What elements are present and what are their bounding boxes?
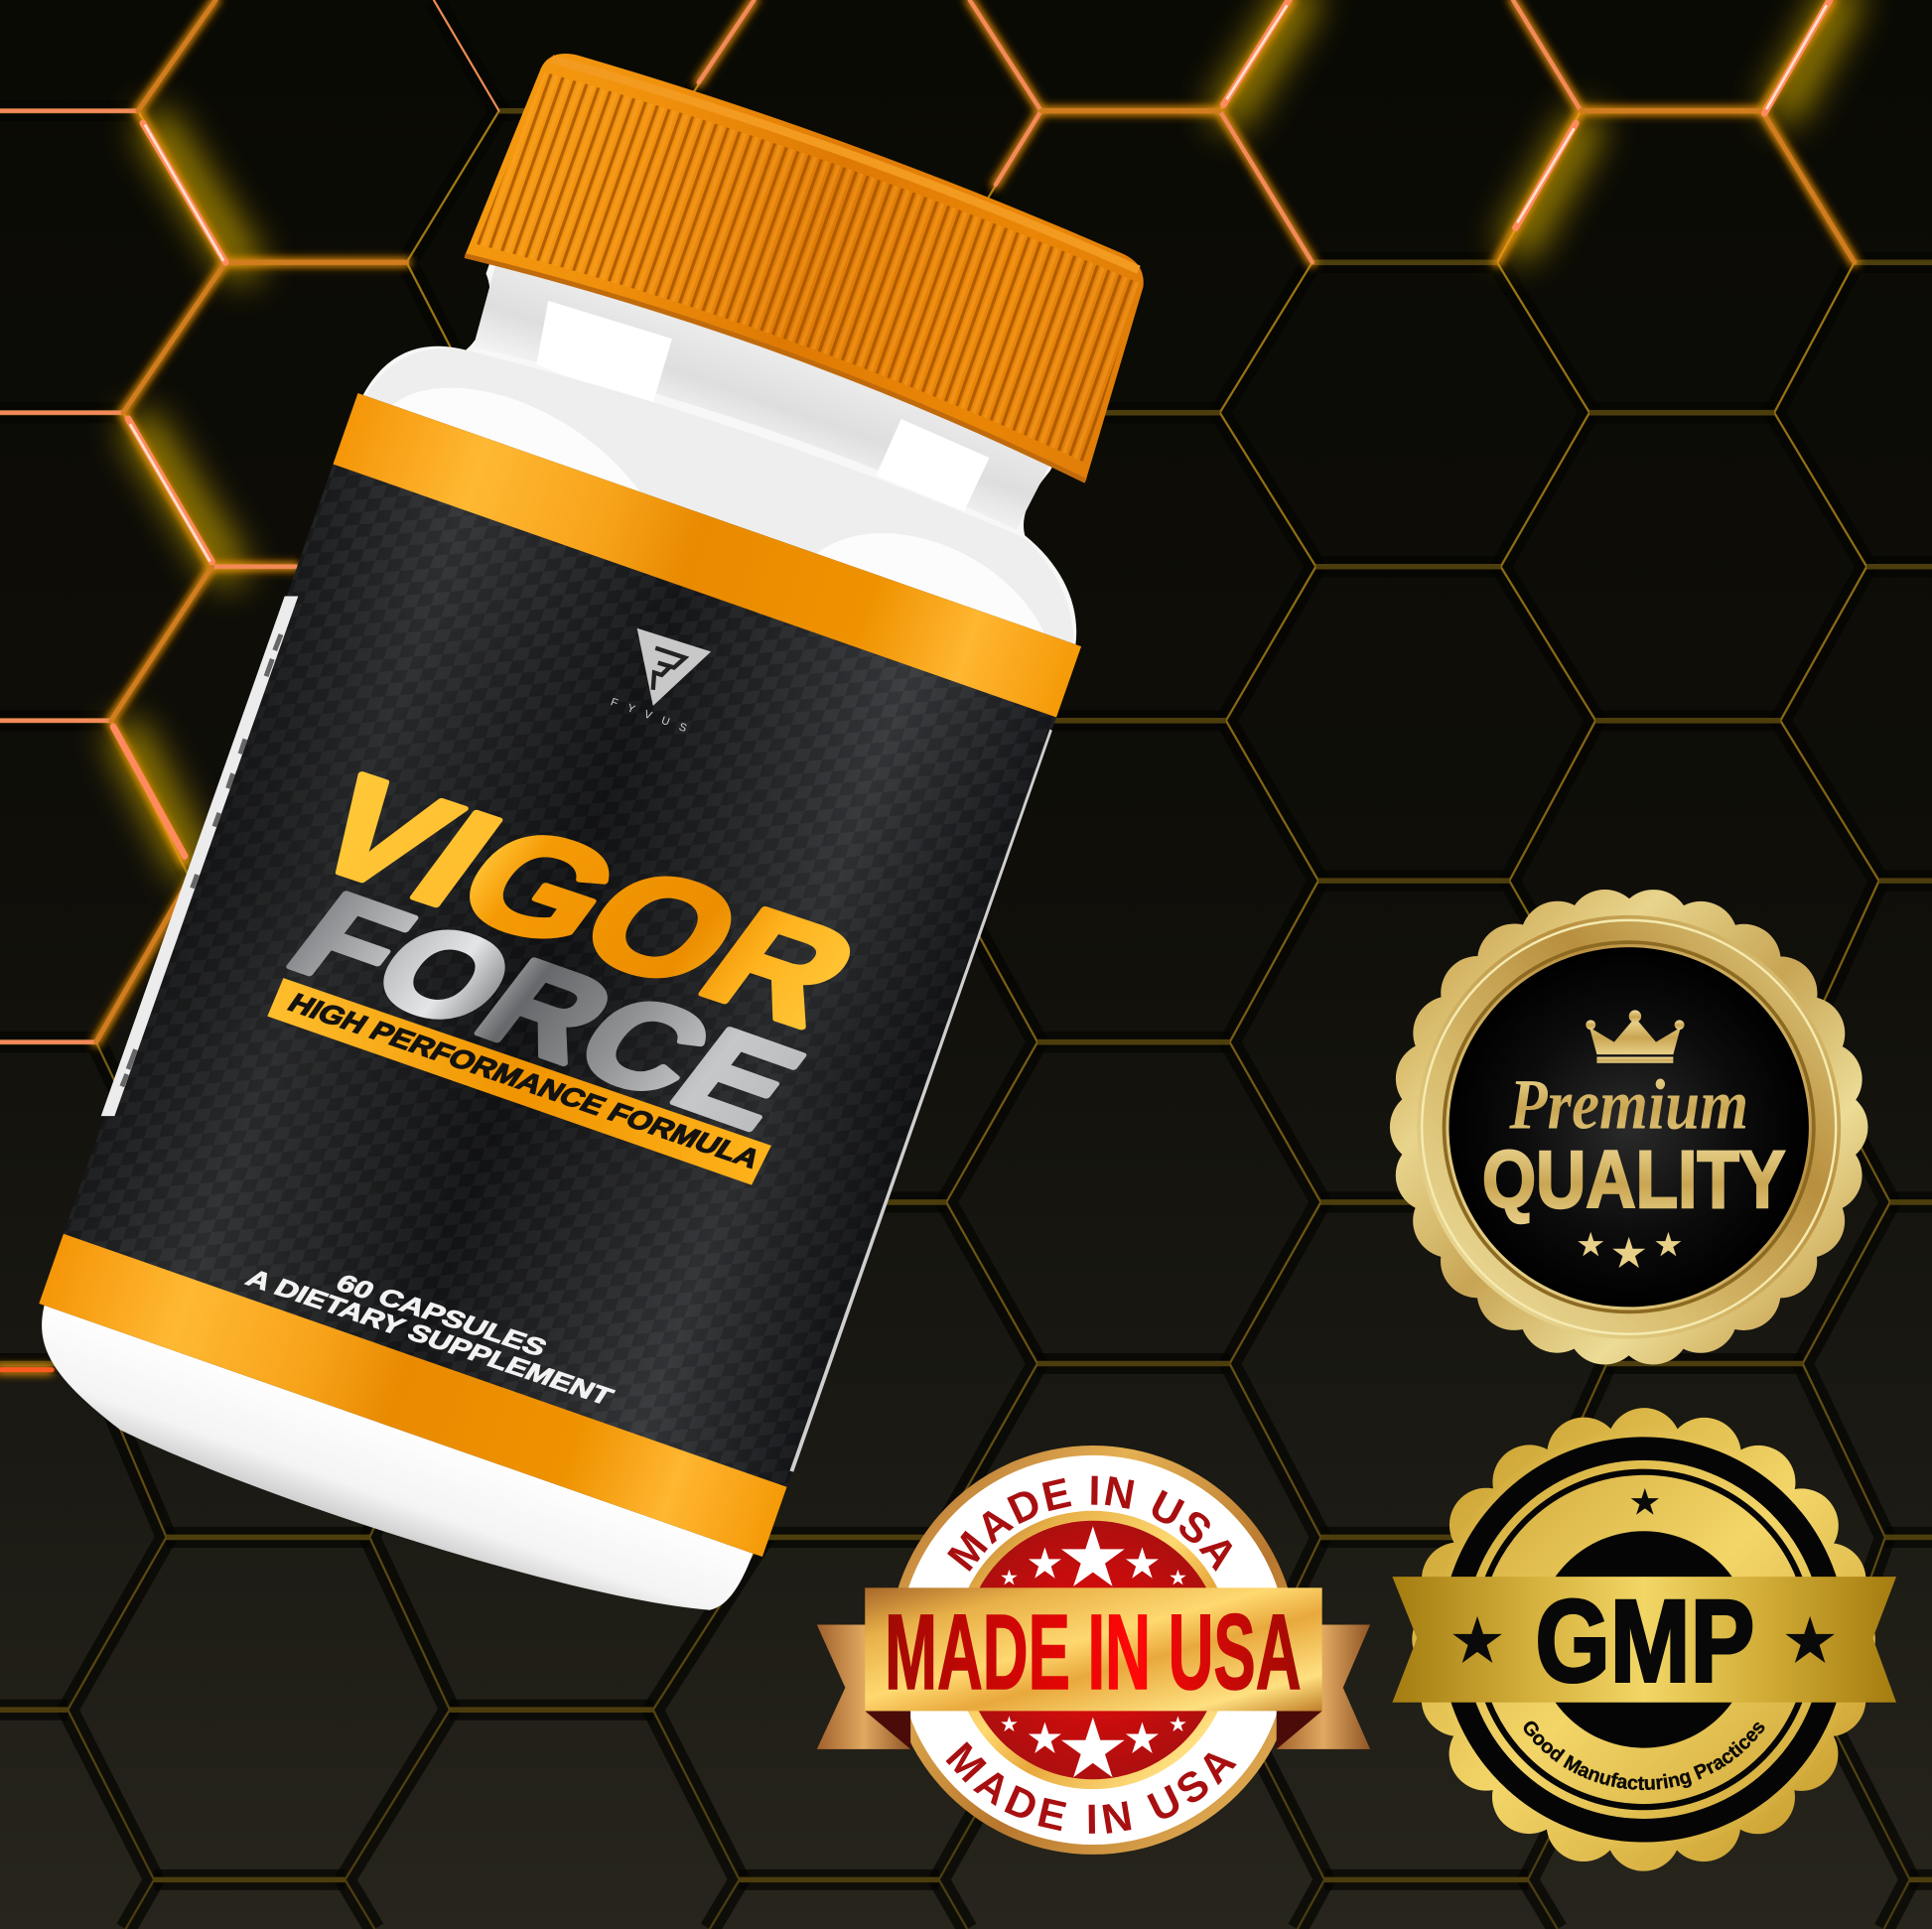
badge: made in USA (816, 1446, 1370, 1855)
label panel with carbon texture (39, 393, 1081, 1557)
ribbon wordmark: MADE IN USA (885, 1591, 1302, 1712)
ribbon tails (817, 1625, 1370, 1749)
bottle shoulder and neck (356, 214, 1141, 659)
icon: star (1631, 1488, 1659, 1515)
icon: three stars (1578, 1232, 1681, 1268)
premium script: Premium (1508, 1065, 1748, 1145)
bottom orange band (39, 1234, 786, 1557)
main ribbon (865, 1587, 1322, 1711)
stars on red field (1001, 1526, 1186, 1777)
product name: VIGOR: VIGOR (279, 748, 888, 1054)
ring text top: MADE IN USA (947, 1475, 1233, 1572)
bottle base (10, 1296, 757, 1650)
glowing honeycomb edges (0, 0, 1855, 1370)
icon: left ribbon star (1452, 1616, 1502, 1663)
badge: premium quality (1417, 915, 1841, 1339)
product bottle (5, 18, 1212, 1653)
label side strip: right (790, 730, 1052, 1472)
tagline text: HIGH PERFORMANCE FORMULA (282, 988, 766, 1173)
icon: crown (1586, 1010, 1685, 1063)
circular text: Good Manufacturing Practices (1523, 1722, 1765, 1791)
label side strip: left (101, 597, 298, 1116)
top orange band (333, 393, 1081, 718)
logo wordmark: FYVUS (609, 696, 688, 735)
capsule count: 60 CAPSULES (331, 1270, 552, 1362)
icon: right ribbon star (1785, 1616, 1835, 1663)
badge: GMP (1392, 1408, 1896, 1871)
ring text bottom: MADE IN USA (945, 1741, 1237, 1834)
tagline bar (267, 978, 771, 1185)
GMP letters: GMP (1535, 1576, 1754, 1707)
bottle in local frame (5, 18, 1212, 1653)
ribbon folds (865, 1711, 1322, 1749)
quality word: QUALITY (1482, 1135, 1785, 1225)
cap (463, 37, 1165, 481)
GMP ribbon (1392, 1577, 1896, 1703)
supplement line: A DIETARY SUPPLEMENT (240, 1265, 619, 1411)
brand logo (609, 628, 711, 735)
product name: FORCE: FORCE (263, 868, 829, 1154)
label side strip text marks (122, 634, 281, 1086)
